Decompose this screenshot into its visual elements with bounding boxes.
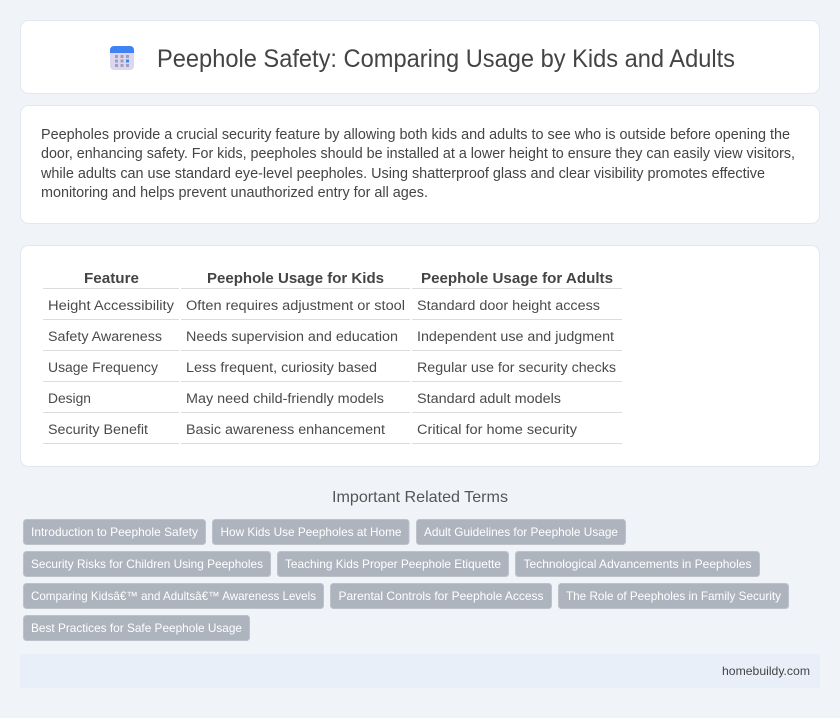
- table row: security benefit: Basic awareness enhancement: [186, 422, 385, 438]
- table header row: [84, 271, 613, 287]
- table header row: Feature: [84, 271, 139, 287]
- table row: design: May need child-friendly models: [186, 391, 384, 407]
- table row: height accessibility: Often requires adjustment or stool: [186, 298, 405, 314]
- tag: [278, 552, 508, 576]
- text block: introduction paragraph: while adults can use standard eye-level peepholes. Using shatterproof glass and clear visibility promotes effective: [40, 166, 765, 182]
- tag: [24, 552, 270, 576]
- table row: safety awareness: Needs supervision and education: [186, 329, 398, 345]
- tag: Parental Controls for Peephole Access: [338, 589, 544, 603]
- heading: important related terms: Important Related Terms: [332, 489, 508, 506]
- table row: design: Design: [48, 391, 91, 407]
- tag: [24, 584, 324, 608]
- tag: How Kids Use Peepholes at Home: [220, 525, 402, 539]
- tag: [416, 520, 626, 544]
- table row: height accessibility: [48, 298, 600, 314]
- table row: security benefit: Critical for home security: [417, 422, 578, 438]
- tag: [24, 616, 250, 640]
- tag: Security Risks for Children Using Peepholes: [31, 557, 263, 571]
- title: Peephole Safety: Comparing Usage by Kids and Adults: [157, 46, 735, 73]
- table row: usage frequency: Usage Frequency: [48, 360, 159, 376]
- tag: The Role of Peepholes in Family Security: [566, 589, 781, 603]
- table row: security benefit: Security Benefit: [48, 422, 148, 438]
- table row: height accessibility: Height Accessibility: [48, 298, 175, 314]
- panel: header: [20, 20, 820, 94]
- table row: design: [48, 391, 561, 407]
- table row: design: Standard adult models: [417, 391, 561, 407]
- table row: usage frequency: [48, 360, 616, 376]
- table row: security benefit: [48, 422, 578, 438]
- tag: Teaching Kids Proper Peephole Etiquette: [285, 557, 501, 571]
- text block: introduction paragraph: monitoring and helps prevent unauthorized entry for all ages.: [41, 185, 428, 201]
- tag: Adult Guidelines for Peephole Usage: [424, 525, 618, 539]
- table header row: Peephole Usage for Adults: [421, 271, 613, 287]
- tag: [558, 584, 788, 608]
- table row: usage frequency: Regular use for security checks: [417, 360, 616, 376]
- tag: [516, 552, 760, 576]
- tag: Comparing Kidsâ€™ and Adultsâ€™ Awareness Levels: [31, 589, 316, 603]
- text block: introduction paragraph: [40, 127, 795, 201]
- icon: calendar: [110, 46, 134, 70]
- table row: safety awareness: Safety Awareness: [48, 329, 162, 345]
- tag: Technological Advancements in Peepholes: [524, 557, 752, 571]
- text block: introduction paragraph: Peepholes provide a crucial security feature by allowing both kids and adults to see who is outside before opening the: [41, 127, 790, 143]
- footer: [20, 654, 820, 688]
- table row: usage frequency: Less frequent, curiosity based: [186, 360, 377, 376]
- table row: height accessibility: Standard door height access: [417, 298, 600, 314]
- panel: comparison table: [20, 246, 820, 466]
- tag: Best Practices for Safe Peephole Usage: [31, 621, 242, 635]
- tag: [330, 584, 552, 608]
- tag: Introduction to Peephole Safety: [31, 525, 198, 539]
- text block: introduction paragraph: door, enhancing safety. For kids, peepholes should be installed at a lower height to ensure they can easily view visitors,: [41, 146, 795, 162]
- tags: related terms: [24, 520, 788, 640]
- table header row: Peephole Usage for Kids: [207, 271, 384, 287]
- tag: [212, 520, 409, 544]
- table row: safety awareness: [48, 329, 614, 345]
- tag: [24, 520, 206, 544]
- panel: introduction: [20, 106, 820, 224]
- table row: safety awareness: Independent use and judgment: [417, 329, 614, 345]
- footer: site name: homebuildy.com: [722, 664, 810, 678]
